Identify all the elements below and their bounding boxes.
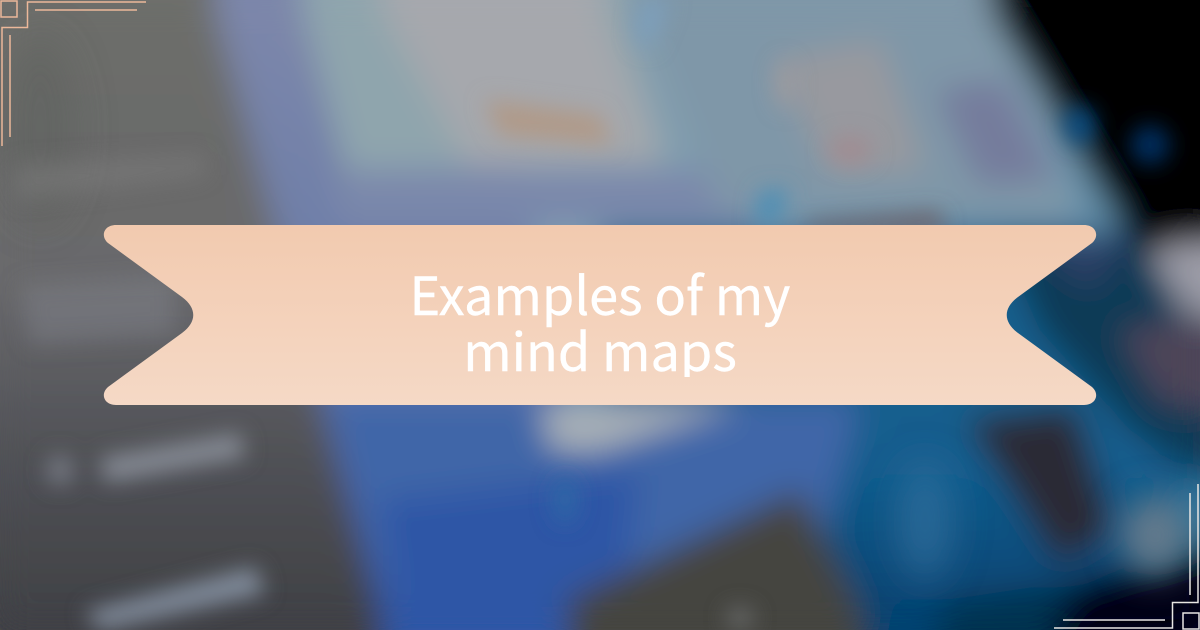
corner ornament: top left bbox=[0, 0, 146, 146]
title bbox=[410, 265, 790, 377]
corner ornament: bottom right bbox=[1054, 484, 1200, 630]
